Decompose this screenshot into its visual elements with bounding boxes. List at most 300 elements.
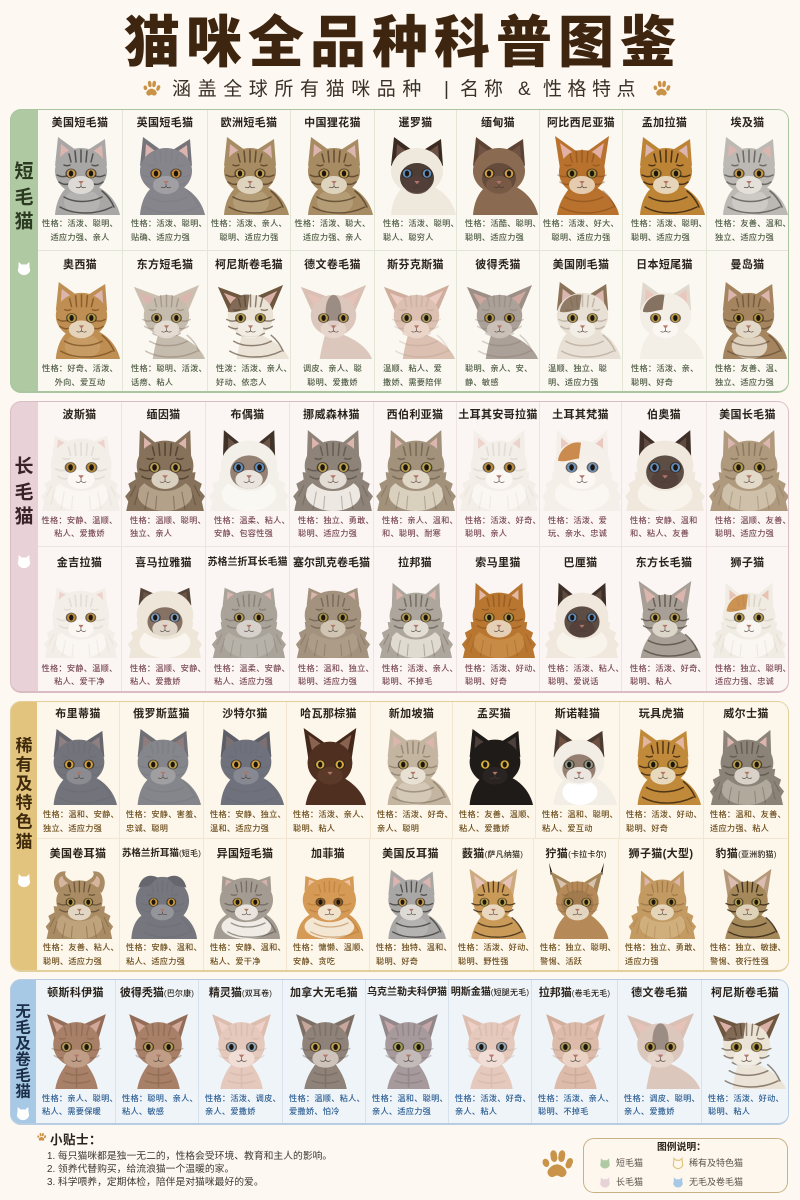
- cat card: 威尔士猫: 威尔士猫: [723, 708, 769, 720]
- cat card: 土耳其安哥拉猫: [457, 402, 540, 547]
- category tab: 长毛猫: 长: [14, 457, 34, 478]
- cat card: 斯诺鞋猫: 性格：温和、聪明、: [542, 810, 618, 819]
- cat card: 布偶猫: 性格：温柔、粘人、: [214, 516, 290, 525]
- cat card: 玩具虎猫: 聪明、好奇: [626, 824, 668, 832]
- cat card: 埃及猫: 独立、适应力强: [715, 232, 774, 242]
- cat card: 中国狸花猫: 性格：活泼、聪大、: [295, 219, 370, 228]
- cat card: 斯诺鞋猫: 粘人、爱互动: [542, 824, 593, 832]
- cat card: 挪威森林猫: 性格：独立、勇敢、: [298, 516, 374, 525]
- cat card: 缅甸猫: [457, 110, 540, 251]
- category tab: 短毛猫: [10, 109, 38, 393]
- cat card: 顿斯科伊猫: 粘人、需要保暖: [42, 1107, 101, 1116]
- cat card: 加拿大无毛猫: [283, 980, 366, 1124]
- cat card: 柯尼斯卷毛猫: 好动、依恋人: [216, 378, 267, 386]
- legend item: 无毛及卷毛猫: 无毛及卷毛猫: [689, 1177, 743, 1187]
- cat card: 斯芬克斯猫: 温顺、粘人、爱: [383, 364, 442, 373]
- cat card: 沙特尔猫: 沙特尔猫: [222, 708, 268, 720]
- cat card: 拉邦猫: [374, 547, 457, 692]
- cat card: 沙特尔猫: [204, 701, 287, 839]
- cat card: 美国反耳猫: 聪明、好奇: [376, 956, 418, 966]
- cat card: 乌克兰勒夫科伊猫: 亲人、适应力强: [372, 1107, 431, 1116]
- cat card: 波斯猫: [38, 402, 122, 547]
- cat card: 狞猫(卡拉卡尔): 警惕、活跃: [540, 956, 582, 966]
- cat card: 异国短毛猫: [204, 839, 287, 972]
- cat card: 美国短毛猫: 美国短毛猫: [52, 117, 108, 129]
- cat card: 德文卷毛猫: 德文卷毛猫: [304, 259, 361, 271]
- cat card: 拉邦猫: 聪明、不掉毛: [382, 676, 433, 686]
- cat card: 日本短尾猫: 日本短尾猫: [636, 259, 693, 271]
- icon: tips paw: [37, 1133, 46, 1141]
- cat card: 薮猫(萨凡纳猫): [452, 839, 534, 972]
- cat card: 加菲猫: 安静、贪吃: [293, 956, 335, 966]
- cat card: 德文卷毛猫: [291, 251, 375, 392]
- legend item: 短毛猫: 短毛猫: [616, 1158, 643, 1168]
- panel: 短毛猫: [10, 109, 789, 393]
- cat card: 玩具虎猫: 性格：活泼、好动、: [626, 810, 702, 819]
- cat card: 伯奥猫: 伯奥猫: [647, 409, 681, 421]
- cat card: 西伯利亚猫: 和、聪明、耐寒: [382, 529, 441, 538]
- cat card: 柯尼斯卷毛猫: 柯尼斯卷毛猫: [711, 987, 779, 999]
- cat card: 德文卷毛猫: 聪明、爱撒娇: [307, 378, 358, 386]
- cat card: 哈瓦那棕猫: 聪明、粘人: [293, 824, 335, 832]
- cat card: 彼得秃猫(巴尔康): 粘人、敏感: [122, 1107, 164, 1116]
- cat card: 狮子猫(大型): 适应力强: [625, 956, 659, 966]
- cat card: 异国短毛猫: 异国短毛猫: [217, 848, 273, 860]
- cat card: 明斯金猫(短腿无毛): [449, 980, 532, 1124]
- cat card: 狮子猫(大型): 性格：独立、勇敢、: [625, 943, 701, 952]
- category tab: 无毛及卷毛猫: 毛: [15, 1019, 31, 1036]
- cat card: 英国短毛猫: [123, 110, 208, 251]
- cat card: 塞尔凯克卷毛猫: [290, 547, 374, 692]
- cat card: 阿比西尼亚猫: [540, 110, 623, 251]
- legend item: 长毛猫: [600, 1177, 643, 1188]
- category tab: 无毛及卷毛猫: 毛: [15, 1067, 31, 1084]
- subtitle text: |: [444, 79, 449, 100]
- cat card: 彼得秃猫: [457, 251, 540, 392]
- cat card: 明斯金猫(短腿无毛): 亲人、粘人: [455, 1107, 497, 1116]
- panel: 稀有及特色猫: [10, 701, 789, 972]
- subtitle text: &: [518, 79, 531, 100]
- cat card: 狮子猫: 狮子猫: [730, 557, 765, 569]
- cat card: 埃及猫: 埃及猫: [730, 117, 765, 129]
- cat card: 布偶猫: [206, 402, 290, 547]
- cat card: 中国狸花猫: 适应力强、亲人: [303, 232, 362, 242]
- cat card: 精灵猫(双耳卷): 性格：活泼、调皮、: [205, 1094, 281, 1103]
- cat card: 乌克兰勒夫科伊猫: 性格：温和、聪明、: [372, 1094, 448, 1103]
- cat card: 挪威森林猫: 聪明、适应力强: [298, 529, 357, 538]
- cat card: 柯尼斯卷毛猫: 聪明、粘人: [708, 1107, 750, 1116]
- icon: large paw: [542, 1150, 573, 1178]
- cat card: 俄罗斯蓝猫: 俄罗斯蓝猫: [133, 708, 190, 720]
- cat card: 金吉拉猫: 金吉拉猫: [57, 557, 102, 569]
- cat card: 孟买猫: 孟买猫: [477, 708, 511, 720]
- cat card: 布里蒂猫: 性格：温和、安静、: [43, 810, 119, 819]
- legend item: 长毛猫: 长毛猫: [616, 1177, 643, 1187]
- cat card: 土耳其梵猫: 玩、亲水、忠诚: [548, 529, 607, 538]
- cat card: 薮猫(萨凡纳猫): 薮猫(萨凡纳猫): [462, 848, 523, 860]
- cat card: 中国狸花猫: 中国狸花猫: [304, 117, 361, 129]
- subtitle text: 涵盖全球所有猫咪品种: [172, 79, 428, 100]
- legend title: 图例说明：: [657, 1142, 706, 1153]
- panel: 长毛猫: [10, 401, 789, 693]
- cat card: 豹猫(亚洲豹猫): [704, 839, 789, 972]
- cat card: 美国反耳猫: 性格：独特、温和、: [376, 943, 452, 952]
- cat card: 埃及猫: 性格：友善、温和、: [715, 219, 789, 228]
- cat card: 彼得秃猫: 彼得秃猫: [475, 259, 521, 271]
- cat card: 奥西猫: 奥西猫: [63, 259, 97, 271]
- cat card: 斯诺鞋猫: [536, 701, 620, 839]
- cat card: 德文卷毛猫: 亲人、爱撒娇: [624, 1107, 675, 1116]
- cat card: 曼岛猫: 性格：友善、温、: [715, 364, 783, 373]
- cat card: 东方长毛猫: 聪明、粘人: [630, 676, 672, 686]
- cat card: 挪威森林猫: 挪威森林猫: [303, 409, 360, 421]
- cat card: 缅甸猫: 聪明、适应力强: [465, 232, 524, 242]
- cat card: 日本短尾猫: 聪明、好奇: [631, 378, 673, 386]
- cat card: 塞尔凯克卷毛猫: 性格：温和、独立、: [298, 664, 374, 672]
- cat card: 彼得秃猫(巴尔康): 性格：聪明、亲人、: [122, 1094, 198, 1103]
- cat card: 斯芬克斯猫: 斯芬克斯猫: [387, 259, 444, 271]
- cat card: 苏格兰折耳猫(短毛): 性格：安静、温和、: [126, 943, 202, 952]
- category tab: 稀有及特色猫: 稀: [16, 737, 32, 756]
- cat card: 缅因猫: 缅因猫: [146, 409, 181, 421]
- cat card: 彼得秃猫(巴尔康): 彼得秃猫(巴尔康): [120, 987, 194, 999]
- cat card: 拉邦猫(卷毛无毛): 聪明、不掉毛: [538, 1107, 589, 1116]
- legend: [583, 1138, 788, 1193]
- cat card: 西伯利亚猫: 性格：亲人、温和、: [382, 516, 458, 525]
- cat card: 奥西猫: [38, 251, 123, 392]
- cat card: 苏格兰折耳猫(短毛): [120, 839, 204, 972]
- cat card: 巴厘猫: 聪明、爱说话: [548, 676, 599, 686]
- cat card: 明斯金猫(短腿无毛): 明斯金猫(短腿无毛): [451, 987, 529, 998]
- cat card: 拉邦猫: 性格：活泼、亲人、: [382, 664, 458, 672]
- cat card: 阿比西尼亚猫: 性格：活泼、好大、: [543, 219, 619, 228]
- cat card: 斯芬克斯猫: [375, 251, 457, 392]
- cat card: 柯尼斯卷毛猫: [208, 251, 291, 392]
- cat card: 玩具虎猫: [620, 701, 704, 839]
- cat card: 俄罗斯蓝猫: 忠诚、聪明: [126, 824, 168, 832]
- tips block: [37, 1133, 332, 1188]
- cat card: 波斯猫: 波斯猫: [62, 409, 97, 421]
- cat card: 布里蒂猫: 独立、适应力强: [43, 824, 102, 832]
- cat card: 东方短毛猫: 东方短毛猫: [137, 259, 193, 271]
- subtitle text: [172, 78, 641, 100]
- cat card: 柯尼斯卷毛猫: 性泼：活泼、亲人、: [216, 364, 292, 373]
- cat card: 苏格兰折耳长毛猫: 苏格兰折耳长毛猫: [208, 557, 288, 568]
- cat card: 异国短毛猫: 粘人、爱干净: [210, 956, 261, 966]
- cat card: 新加坡猫: 亲人、聪明: [377, 824, 419, 832]
- cat card: 美国长毛猫: [707, 402, 789, 547]
- cat card: 西伯利亚猫: 西伯利亚猫: [387, 409, 443, 421]
- cat card: 美国刚毛猫: 温顺、独立、聪: [548, 364, 607, 373]
- cat card: 狮子猫(大型): [619, 839, 704, 972]
- cat card: 精灵猫(双耳卷): 亲人、爱撒娇: [205, 1107, 256, 1116]
- cat card: 俄罗斯蓝猫: [120, 701, 204, 839]
- cat card: 曼岛猫: [707, 251, 789, 392]
- cat card: 伯奥猫: [622, 402, 707, 547]
- cat card: 美国长毛猫: 性格：温顺、友善、: [715, 516, 789, 525]
- cat card: 东方长毛猫: 东方长毛猫: [636, 557, 692, 569]
- cat card: 土耳其安哥拉猫: 土耳其安哥拉猫: [458, 409, 538, 421]
- legend item: 稀有及特色猫: 稀有及特色猫: [689, 1158, 743, 1168]
- tips list: [47, 1150, 332, 1188]
- cat card: 阿比西尼亚猫: 阿比西尼亚猫: [547, 117, 615, 129]
- cat card: 东方短毛猫: [123, 251, 208, 392]
- cat card: 豹猫(亚洲豹猫): 豹猫(亚洲豹猫): [715, 848, 777, 860]
- cat card: 苏格兰折耳猫(短毛): 苏格兰折耳猫(短毛): [122, 848, 201, 859]
- cat card: 美国长毛猫: 美国长毛猫: [719, 409, 776, 421]
- cat card: 孟加拉猫: 性格：活泼、聪明、: [631, 219, 707, 228]
- cat card: 狞猫(卡拉卡尔): 性格：独立、聪明、: [540, 943, 616, 952]
- cat card: 巴厘猫: 巴厘猫: [563, 557, 598, 569]
- cat card: 土耳其梵猫: [540, 402, 622, 547]
- cat card: 缅因猫: [122, 402, 206, 547]
- cat card: 乌克兰勒夫科伊猫: [366, 980, 449, 1124]
- category tab: 无毛及卷毛猫: 猫: [15, 1083, 31, 1100]
- cat card: 美国刚毛猫: [540, 251, 623, 392]
- cat card: 挪威森林猫: [290, 402, 374, 547]
- cat card: 东方短毛猫: 性格：聪明、活泼、: [131, 364, 207, 373]
- cat card: 加菲猫: [287, 839, 370, 972]
- cat card: 金吉拉猫: 性格：安静、温顺、: [42, 664, 117, 672]
- cat card: 苏格兰折耳长毛猫: 粘人、适应力强: [214, 676, 273, 686]
- cat card: 布偶猫: 安静、包容性强: [214, 529, 273, 538]
- cat card: 顿斯科伊猫: 性格：亲人、聪明、: [42, 1094, 118, 1103]
- cat card: 喜马拉雅猫: 喜马拉雅猫: [135, 557, 192, 569]
- category tab: 稀有及特色猫: [10, 701, 37, 972]
- cat card: 斯芬克斯猫: 撒娇、需要陪伴: [383, 378, 442, 386]
- cat card: 狮子猫: 适应力强、忠诚: [715, 676, 774, 686]
- cat card: 孟加拉猫: 孟加拉猫: [642, 117, 687, 129]
- cat card: 美国刚毛猫: 美国刚毛猫: [553, 259, 609, 271]
- cat card: 威尔士猫: [704, 701, 789, 839]
- cat card: 新加坡猫: 新加坡猫: [389, 708, 434, 720]
- cat card: 中国狸花猫: [291, 110, 375, 251]
- category tab: 无毛及卷毛猫: 卷: [15, 1051, 31, 1068]
- cat card: 波斯猫: 粘人、爱撒娇: [54, 529, 105, 538]
- cat card: 美国卷耳猫: [37, 839, 120, 972]
- cat card: 日本短尾猫: [623, 251, 707, 392]
- cat card: 美国长毛猫: 聪明、适应力强: [715, 529, 774, 538]
- cat card: 狮子猫(大型): 狮子猫(大型): [629, 848, 693, 860]
- cat card: 日本短尾猫: 性格：活泼、亲、: [631, 364, 699, 373]
- cat card: 狞猫(卡拉卡尔): 狞猫(卡拉卡尔): [545, 848, 607, 860]
- cat card: 彼得秃猫(巴尔康): [116, 980, 199, 1124]
- cat card: 暹罗猫: 性格：活泼、聪明、: [383, 219, 459, 228]
- cat card: 曼岛猫: 曼岛猫: [730, 259, 765, 271]
- cat card: 明斯金猫(短腿无毛): 性格：活泼、好奇、: [455, 1094, 531, 1103]
- cat card: 德文卷毛猫: 调皮、亲人、聪: [303, 364, 362, 373]
- tips list: 2. 领养代替购买，给流浪猫一个温暖的家。: [47, 1164, 234, 1175]
- cat card: 奥西猫: 外向、爱互动: [55, 378, 105, 386]
- category tab: 稀有及特色猫: 及: [16, 775, 32, 794]
- category tab: 长毛猫: [10, 401, 38, 693]
- cat card: 沙特尔猫: 温和、适应力强: [210, 824, 269, 832]
- cat card: 土耳其梵猫: 土耳其梵猫: [552, 409, 609, 421]
- category tab: 短毛猫: 猫: [14, 212, 34, 233]
- cat card: 狮子猫: [707, 547, 789, 692]
- cat card: 伯奥猫: 和、粘人、友善: [630, 529, 689, 538]
- cat card: 顿斯科伊猫: [36, 980, 116, 1124]
- cat card: 喜马拉雅猫: 性格：温顺、安静、: [130, 664, 206, 672]
- cat card: 美国反耳猫: 美国反耳猫: [382, 848, 439, 860]
- cat card: 哈瓦那棕猫: 哈瓦那棕猫: [300, 708, 357, 720]
- cat card: 暹罗猫: [375, 110, 457, 251]
- cat card: 威尔士猫: 性格：温和、友善、: [710, 810, 786, 819]
- cat card: 狮子猫: 性格：独立、聪明、: [715, 664, 789, 672]
- cat card: 欧洲短毛猫: 欧洲短毛猫: [221, 117, 277, 129]
- cat card: 东方长毛猫: [622, 547, 707, 692]
- cat card: 孟加拉猫: 聪明、适应力强: [631, 232, 690, 242]
- cat card: 缅因猫: 独立、亲人: [130, 529, 172, 538]
- subtitle text: 名称: [460, 79, 508, 100]
- cat card: 索马里猫: 聪明、好奇: [465, 676, 507, 686]
- cat card: 精灵猫(双耳卷): 精灵猫(双耳卷): [209, 987, 272, 999]
- cat card: 布里蒂猫: 布里蒂猫: [55, 708, 101, 720]
- cat card: 哈瓦那棕猫: [287, 701, 371, 839]
- title: 猫咪全品种科普图鉴: [124, 11, 682, 74]
- cat card: 东方长毛猫: 性格：活泼、好奇、: [630, 664, 706, 672]
- tips list: 1. 每只猫咪都是独一无二的，性格会受环境、教育和主人的影响。: [47, 1151, 332, 1162]
- cat card: 加菲猫: 加菲猫: [311, 848, 345, 860]
- cat card: 豹猫(亚洲豹猫): 警惕、夜行性强: [710, 956, 769, 966]
- cat card: 拉邦猫(卷毛无毛): 拉邦猫(卷毛无毛): [539, 987, 610, 999]
- cat card: 玩具虎猫: 玩具虎猫: [639, 708, 684, 720]
- cat card: 布里蒂猫: [37, 701, 120, 839]
- category tab: 稀有及特色猫: 色: [16, 813, 32, 832]
- cat card: 加拿大无毛猫: 爱撒娇、怕冷: [289, 1107, 340, 1116]
- icon: right paw: [654, 80, 670, 96]
- cat card: 孟买猫: [453, 701, 536, 839]
- cat card: 埃及猫: [707, 110, 789, 251]
- cat card: 金吉拉猫: 粘人、爱干净: [54, 676, 105, 686]
- category tab: 无毛及卷毛猫: [10, 979, 36, 1125]
- cat card: 彼得秃猫: 聪明、亲人、安、: [465, 364, 533, 373]
- cat card: 孟买猫: 粘人、爱撒娇: [459, 824, 510, 832]
- cat card: 柯尼斯卷毛猫: [702, 980, 789, 1124]
- cat card: 俄罗斯蓝猫: 性格：安静、害羞、: [126, 810, 202, 819]
- cat card: 塞尔凯克卷毛猫: 聪明、适应力强: [298, 676, 357, 686]
- cat card: 柯尼斯卷毛猫: 性格：活泼、好动、: [708, 1094, 784, 1103]
- cat card: 乌克兰勒夫科伊猫: 乌克兰勒夫科伊猫: [367, 987, 447, 998]
- cat card: 索马里猫: [457, 547, 540, 692]
- cat card: 美国刚毛猫: 明、适应力强: [548, 378, 599, 386]
- cat card: 巴厘猫: [540, 547, 622, 692]
- cat card: 土耳其安哥拉猫: 聪明、亲人: [465, 529, 507, 538]
- category tab: 短毛猫: 短: [14, 162, 34, 183]
- cat card: 索马里猫: 索马里猫: [475, 557, 521, 569]
- cat card: 土耳其安哥拉猫: 性格：活泼、好奇、: [465, 516, 541, 525]
- subtitle row: [144, 78, 670, 100]
- cat card: 哈瓦那棕猫: 性格：活泼、亲人、: [293, 810, 369, 819]
- cat card: 奥西猫: 性格：好奇、活泼、: [42, 364, 118, 373]
- cat card: 阿比西尼亚猫: 聪明、适应力强: [551, 232, 611, 242]
- tips list: 3. 科学喂养，定期体检，陪伴是对猫咪最好的爱。: [47, 1177, 264, 1188]
- cat card: 新加坡猫: 性格：活泼、好奇、: [377, 810, 453, 819]
- cat card: 拉邦猫(卷毛无毛): 性格：活泼、亲人、: [538, 1094, 614, 1103]
- cat card: 加拿大无毛猫: 性格：温顺、粘人、: [289, 1094, 365, 1103]
- cat card: 彼得秃猫: 静、敏感: [465, 378, 499, 386]
- cat card: 精灵猫(双耳卷): [199, 980, 283, 1124]
- category tab: 长毛猫: 毛: [14, 483, 34, 504]
- cat card: 英国短毛猫: 英国短毛猫: [137, 117, 193, 129]
- cat card: 缅因猫: 性格：温顺、聪明、: [130, 516, 206, 525]
- cat card: 薮猫(萨凡纳猫): 性格：活泼、好动、: [458, 943, 534, 952]
- cat card: 波斯猫: 性格：安静、温顺、: [42, 516, 117, 525]
- cat card: 顿斯科伊猫: 顿斯科伊猫: [47, 987, 104, 999]
- cat card: 塞尔凯克卷毛猫: 塞尔凯克卷毛猫: [293, 557, 370, 569]
- legend item: 短毛猫: [600, 1158, 643, 1168]
- cat card: 德文卷毛猫: 德文卷毛猫: [631, 987, 688, 999]
- category tab: 短毛猫: 毛: [14, 188, 34, 209]
- category tab: 稀有及特色猫: 猫: [16, 833, 32, 852]
- cat card: 曼岛猫: 独立、适应力强: [715, 378, 774, 386]
- cat card: 薮猫(萨凡纳猫): 聪明、野性强: [458, 956, 509, 966]
- cat card: 加拿大无毛猫: 加拿大无毛猫: [290, 987, 358, 999]
- cat card: 苏格兰折耳长毛猫: 性格：温柔、安静、: [214, 664, 290, 672]
- cat card: 布偶猫: 布偶猫: [230, 409, 265, 421]
- cat card: 拉邦猫(卷毛无毛): [532, 980, 618, 1124]
- cat card: 暹罗猫: 聪人、聪穷人: [383, 232, 434, 242]
- cat card: 美国短毛猫: [38, 110, 123, 251]
- cat card: 孟加拉猫: [623, 110, 707, 251]
- cat card: 美国短毛猫: 性格：活泼、聪明、: [42, 219, 118, 228]
- category tab: 稀有及特色猫: 特: [16, 794, 32, 813]
- icon: left paw: [144, 80, 160, 96]
- cat card: 美国卷耳猫: 聪明、适应力强: [43, 956, 102, 966]
- category tab: 稀有及特色猫: 有: [16, 756, 32, 775]
- cat card: 德文卷毛猫: [618, 980, 702, 1124]
- cat card: 苏格兰折耳长毛猫: [206, 547, 290, 692]
- cat card: 暹罗猫: 暹罗猫: [398, 117, 433, 129]
- cat card: 美国卷耳猫: 美国卷耳猫: [50, 848, 106, 860]
- cat card: 喜马拉雅猫: [122, 547, 206, 692]
- cat card: 豹猫(亚洲豹猫): 性格：独立、敏捷、: [710, 943, 786, 952]
- cat card: 金吉拉猫: [38, 547, 122, 692]
- cat card: 斯诺鞋猫: 斯诺鞋猫: [555, 708, 600, 720]
- subtitle text: 性格特点: [543, 79, 641, 100]
- cat card: 缅甸猫: 性格：活酷、聪明、: [465, 219, 541, 228]
- cat card: 美国反耳猫: [370, 839, 452, 972]
- cat card: 美国卷耳猫: 性格：友善、粘人、: [43, 943, 119, 952]
- cat card: 英国短毛猫: 贴确、适应力强: [131, 232, 190, 242]
- tips heading: 小贴士：: [50, 1133, 102, 1147]
- cat card: 拉邦猫: 拉邦猫: [398, 557, 432, 569]
- cat card: 新加坡猫: [371, 701, 453, 839]
- cat card: 欧洲短毛猫: 聪明、适应力强: [219, 232, 279, 242]
- panel: 无毛及卷毛猫: [10, 979, 789, 1125]
- category tab: 无毛及卷毛猫: 及: [15, 1035, 31, 1052]
- cat card: 缅甸猫: 缅甸猫: [481, 117, 515, 129]
- cat card: 孟买猫: 性格：友善、温顺、: [459, 810, 535, 819]
- legend item: 稀有及特色猫: [672, 1157, 743, 1170]
- cat card: 沙特尔猫: 性格：安静、独立、: [210, 810, 286, 819]
- cat card: 土耳其梵猫: 性格：活泼、爱: [548, 516, 607, 525]
- cat card: 苏格兰折耳猫(短毛): 粘人、适应力强: [126, 956, 185, 966]
- cat card: 英国短毛猫: 性格：活泼、聪明、: [131, 219, 207, 228]
- cat card: 东方短毛猫: 话痨、粘人: [131, 378, 173, 386]
- cat card: 威尔士猫: 适应力强、粘人: [710, 824, 769, 832]
- cat card: 喜马拉雅猫: 粘人、爱撒娇: [130, 676, 181, 686]
- category tab: 无毛及卷毛猫: 无: [15, 1003, 31, 1020]
- cat card: 德文卷毛猫: 性格：调皮、聪明、: [624, 1094, 700, 1103]
- cat card: 欧洲短毛猫: [208, 110, 291, 251]
- cat card: 西伯利亚猫: [374, 402, 457, 547]
- cat card: 加菲猫: 性格：慵懒、温顺、: [293, 943, 369, 952]
- cat card: 柯尼斯卷毛猫: 柯尼斯卷毛猫: [215, 259, 283, 271]
- cat card: 索马里猫: 性格：活泼、好动、: [465, 664, 541, 672]
- cat card: 巴厘猫: 性格：活泼、粘人、: [548, 664, 624, 672]
- category tab: 长毛猫: 猫: [14, 507, 34, 528]
